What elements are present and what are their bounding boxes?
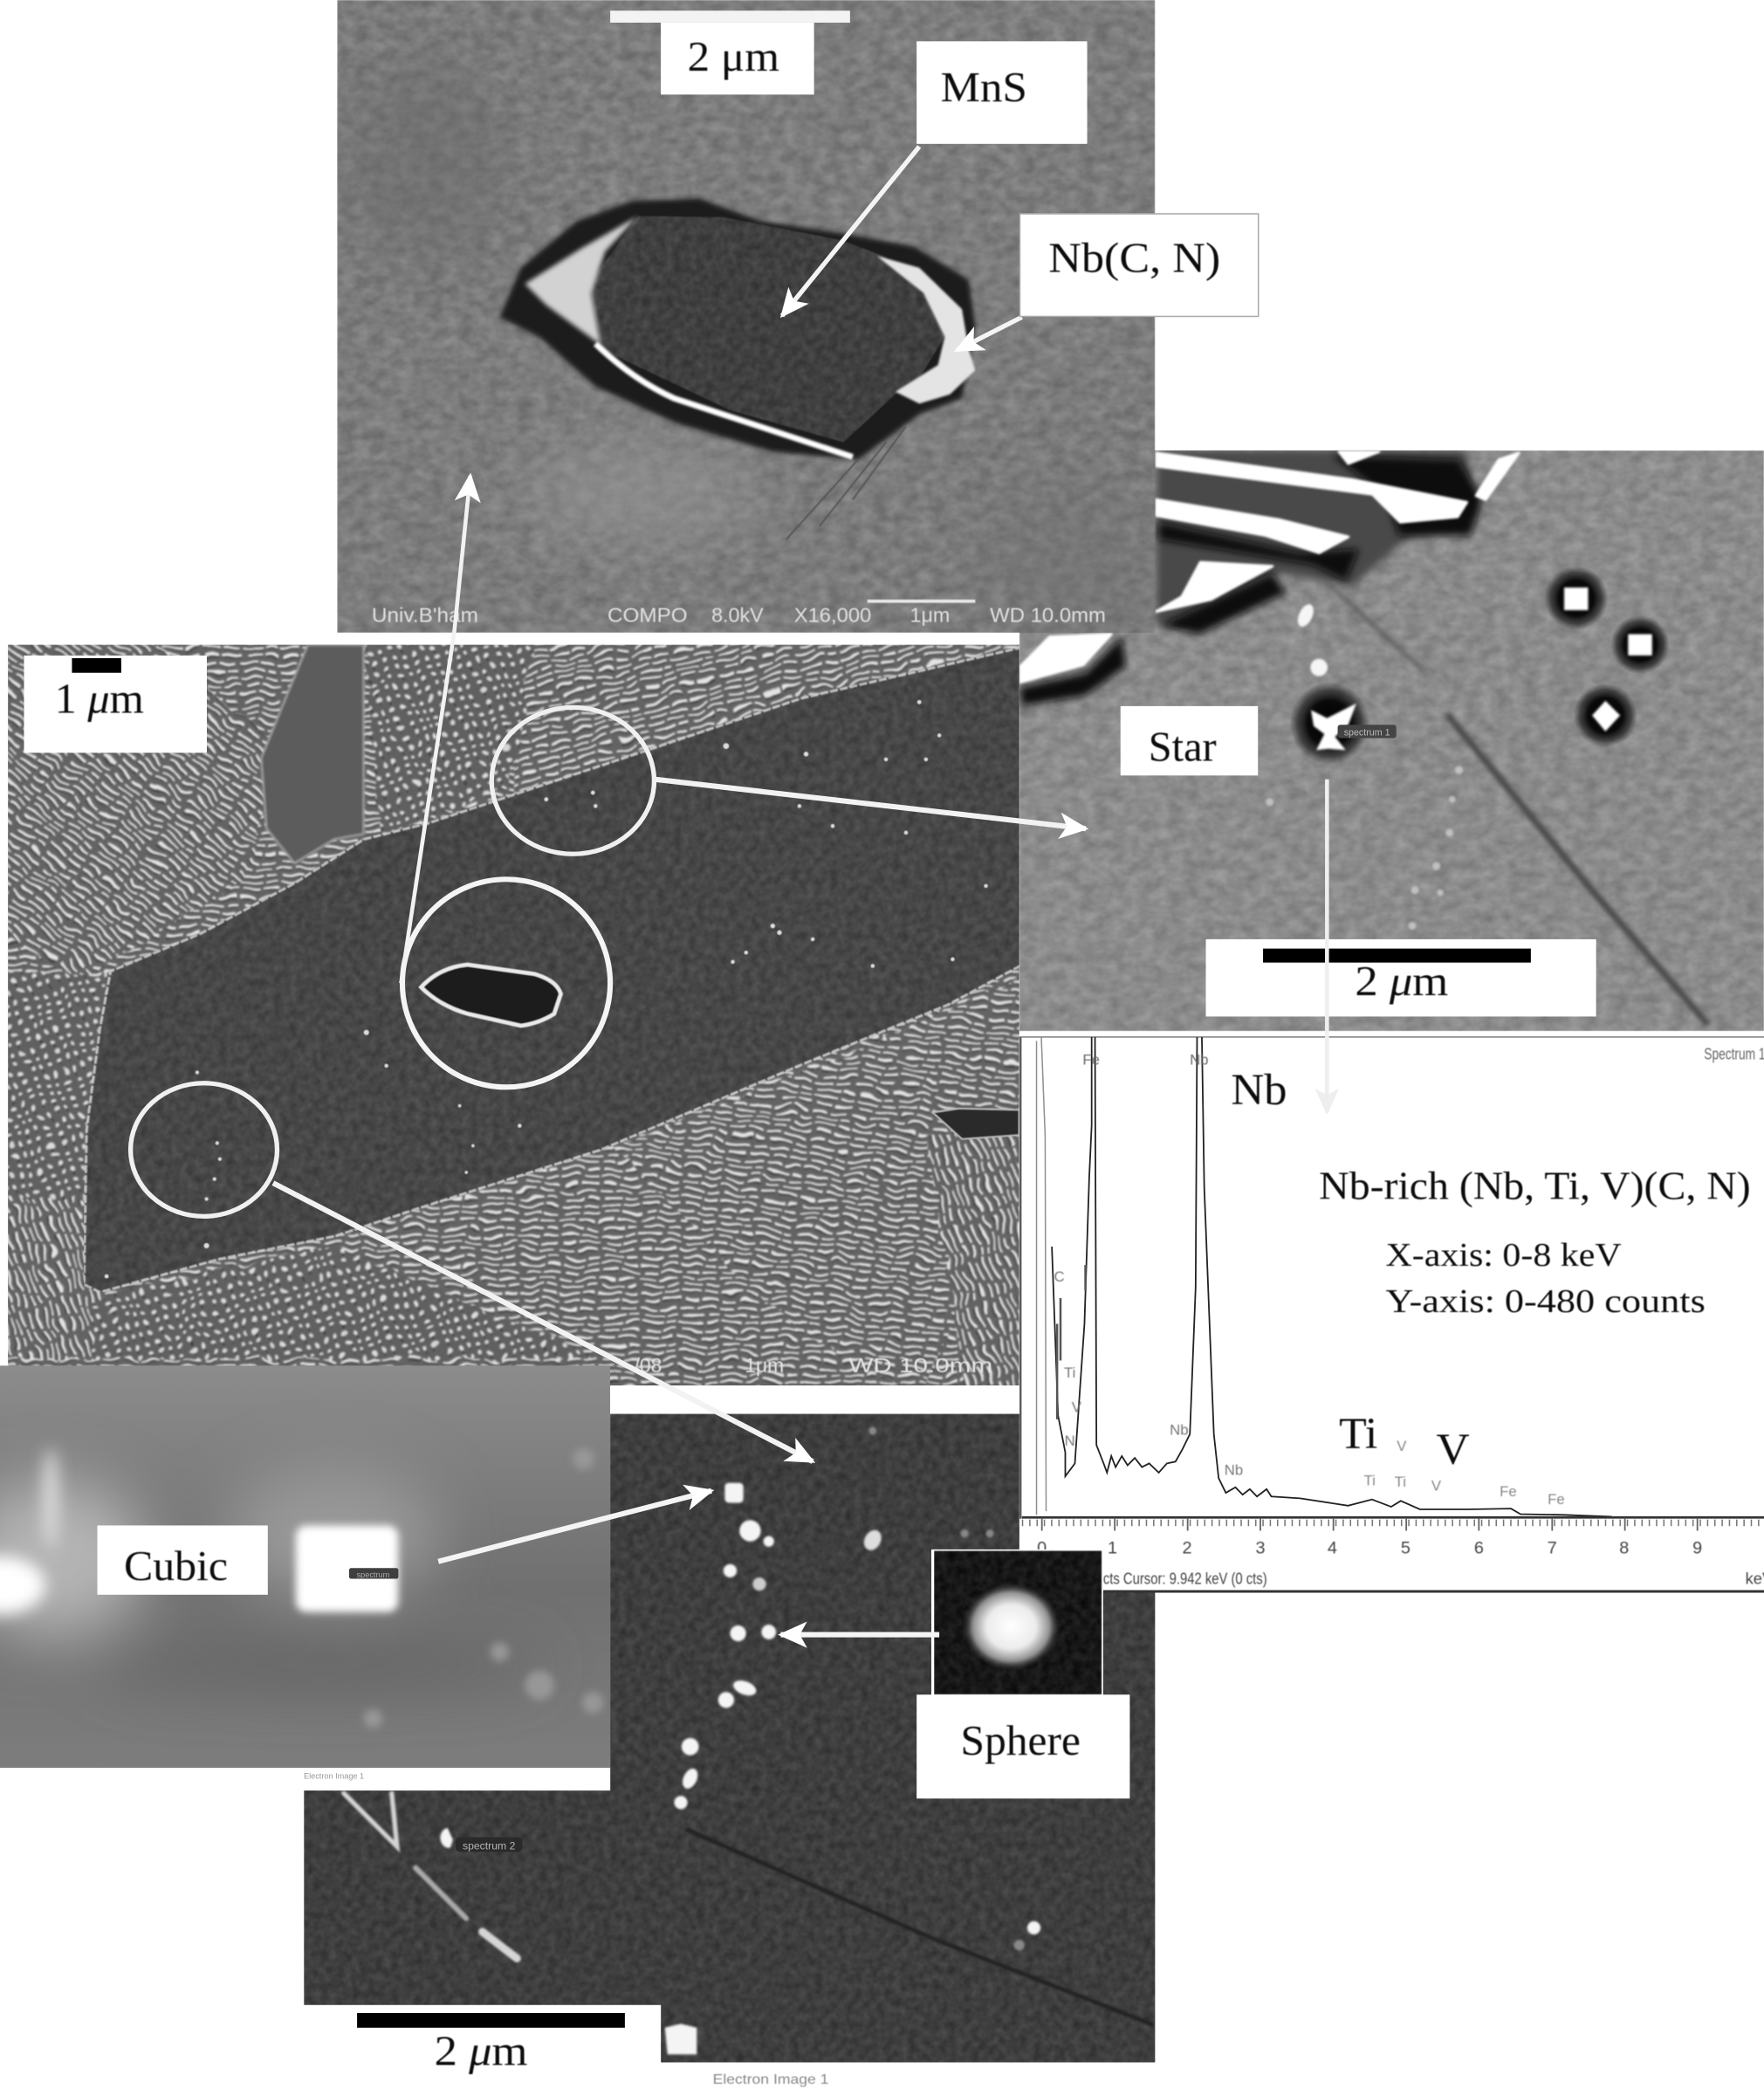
label: Cubic bbox=[97, 1525, 268, 1595]
label: Sphere: Sphere bbox=[961, 1716, 1081, 1764]
panel: star and cube precipitates micrograph bbox=[1019, 450, 1764, 1031]
x axis tick numbers: 9 bbox=[1692, 1538, 1702, 1557]
label: Nb(C, N): Nb(C, N) bbox=[1048, 233, 1220, 281]
small element peak labels: Nb bbox=[1170, 1422, 1189, 1439]
MnS body bbox=[589, 216, 944, 443]
white strip above dark panel bbox=[610, 1385, 1019, 1413]
arrow: upper circle to star micrograph bbox=[655, 780, 1086, 828]
spectrum 2 tag: spectrum 2 bbox=[463, 1839, 516, 1852]
small element peak labels: V bbox=[1397, 1438, 1407, 1454]
scale bar: top 2 um bbox=[610, 10, 850, 94]
top panel background bbox=[337, 0, 1155, 633]
panel: top micrograph of MnS inclusion bbox=[337, 0, 1159, 640]
label: Star bbox=[1121, 706, 1258, 775]
x axis tick numbers: 4 bbox=[1328, 1538, 1337, 1557]
star-shaped precipitate bbox=[1290, 682, 1397, 765]
SEM data strip: X16,000 bbox=[794, 604, 871, 627]
arrow: star particle to spectrum bbox=[1326, 780, 1328, 1112]
scale bar: star panel 2 um bbox=[1205, 939, 1596, 1016]
small element peak labels: V bbox=[1431, 1478, 1442, 1495]
x axis tick numbers: 0 bbox=[1037, 1538, 1047, 1557]
small element peak labels: Ti bbox=[1064, 1364, 1075, 1381]
spectrum background bbox=[1019, 1036, 1764, 1592]
star-shaped precipitate: spectrum 1 bbox=[1344, 727, 1390, 738]
panel: lower dark micrograph with spherical and cubic particles bbox=[304, 1413, 1157, 2064]
spectrum tag bbox=[349, 1568, 398, 1579]
arrow: cubic close-up to particle bbox=[438, 1491, 711, 1562]
MnS inclusion in main micrograph bbox=[421, 965, 561, 1026]
scale bar: 1 um: 1 μm bbox=[55, 674, 144, 722]
x-axis range note: X-axis: 0-8 keV bbox=[1385, 1237, 1622, 1274]
spectrum trace bbox=[1037, 1037, 1611, 1516]
star panel background bbox=[1019, 450, 1764, 1031]
arrow: MnS region to top micrograph bbox=[401, 476, 470, 983]
caption: electron image: Electron Image 1 bbox=[713, 2072, 829, 2087]
label: Star: Star bbox=[1149, 722, 1217, 770]
precipitate dots in dark grain bbox=[105, 700, 988, 1278]
SEM data strip: WD 10.0mm bbox=[990, 604, 1106, 627]
diagonal grain-boundary lines bbox=[1329, 585, 1708, 1025]
small element peak labels bbox=[1054, 1051, 1565, 1508]
cubic precipitates bbox=[1544, 567, 1670, 747]
x axis tick numbers: 8 bbox=[1619, 1538, 1629, 1557]
dark grain-boundary line bbox=[686, 1829, 1154, 2025]
caption under cubic panel: Electron Image 1 bbox=[304, 1771, 364, 1780]
arrow: sphere inset to particle bbox=[780, 1633, 939, 1637]
small element peak labels: Nb bbox=[1190, 1051, 1209, 1068]
SEM data strip: 1μm bbox=[745, 1354, 784, 1377]
arrow: lower circle to dark micrograph bbox=[273, 1183, 813, 1461]
caption under cubic panel bbox=[0, 1768, 610, 1790]
x axis tick numbers bbox=[1037, 1538, 1702, 1557]
SEM data strip bbox=[634, 1357, 992, 1377]
SEM data strip: 1μm bbox=[910, 604, 950, 627]
faint particles bbox=[364, 1448, 603, 1728]
composition label: Nb-rich (Nb, Ti, V)(C, N) bbox=[1319, 1164, 1751, 1208]
SEM data strip: 8.0kV bbox=[711, 604, 764, 627]
cursor readout: cts Cursor: 9.942 keV (0 cts) bbox=[1103, 1570, 1267, 1588]
right Nb(C,N) crescent bbox=[876, 256, 975, 403]
circle: upper precipitates region bbox=[491, 707, 654, 854]
x axis tick numbers: 7 bbox=[1548, 1538, 1557, 1557]
small element peak labels: V bbox=[1072, 1399, 1082, 1416]
SEM data strip: COMPO bbox=[607, 604, 688, 627]
label: Nb(C, N) bbox=[1019, 214, 1259, 316]
scale bar: bottom 2 um: 2 μm bbox=[435, 2027, 527, 2075]
label: Cubic: Cubic bbox=[124, 1542, 228, 1590]
left Nb(C,N) wedge bbox=[525, 216, 638, 345]
arrow: MnS label to inclusion bbox=[782, 147, 919, 316]
frame lines bbox=[1019, 1033, 1764, 1519]
scale bar: top 2 um: 2 μm bbox=[688, 32, 779, 80]
small bright particles bbox=[1294, 601, 1328, 677]
x axis tick numbers: 2 bbox=[1183, 1538, 1192, 1557]
inset: sphere particle bbox=[931, 1550, 1103, 1696]
black shadows around lamellae bbox=[1020, 456, 1481, 706]
x axis bbox=[1022, 1517, 1764, 1531]
bright lower rim bbox=[595, 344, 853, 457]
bright streaks at lower left bbox=[344, 1793, 517, 1958]
SEM data strip: Univ.B'ham bbox=[372, 604, 478, 627]
label: Sphere bbox=[916, 1694, 1129, 1798]
scale bar: 1 um bbox=[24, 656, 207, 752]
V peak label: V bbox=[1436, 1425, 1470, 1474]
spectrum bottom rule bbox=[1103, 1591, 1764, 1592]
dark ferrite grain bbox=[84, 645, 1033, 1292]
strain lines below inclusion bbox=[786, 426, 906, 539]
small element peak labels: Ti bbox=[1395, 1474, 1406, 1490]
scale bar: star panel 2 um: 2 μm bbox=[1355, 957, 1448, 1005]
small upper grain bbox=[261, 645, 364, 863]
cubic panel background bbox=[0, 1365, 610, 1769]
y-axis range note: Y-axis: 0-480 counts bbox=[1385, 1283, 1706, 1320]
x axis tick numbers: 5 bbox=[1401, 1538, 1411, 1557]
inclusion dark rim bbox=[499, 198, 975, 460]
small element peak labels: N bbox=[1065, 1433, 1075, 1449]
x axis tick numbers: 3 bbox=[1255, 1538, 1266, 1557]
small element peak labels: C bbox=[1054, 1268, 1065, 1285]
small element peak labels: Fe bbox=[1500, 1483, 1517, 1500]
lamellar pearlite texture bbox=[0, 640, 1033, 1392]
SEM data strip bbox=[372, 600, 1106, 627]
circle: lower precipitates region bbox=[131, 1083, 277, 1216]
faint dot trail bbox=[1266, 766, 1463, 930]
x axis tick numbers: 1 bbox=[1108, 1538, 1117, 1557]
x axis tick numbers: 6 bbox=[1474, 1538, 1484, 1557]
bright streaks at left bbox=[0, 1448, 58, 1615]
circle: MnS inclusion region bbox=[402, 879, 610, 1087]
cubic particle bbox=[296, 1525, 398, 1612]
scale bar: bottom 2 um bbox=[304, 2005, 661, 2089]
small element peak labels: Fe bbox=[1082, 1051, 1100, 1068]
SEM data strip: WD 10.0mm bbox=[848, 1354, 992, 1377]
Ti peak label: Ti bbox=[1339, 1409, 1377, 1458]
small dark inclusion at right bbox=[933, 1109, 1019, 1139]
soft lighter areas bbox=[0, 1466, 546, 1687]
label: MnS bbox=[916, 41, 1088, 144]
panel: EDS spectrum bbox=[1019, 1033, 1764, 1592]
spectrum tag: spectrum bbox=[357, 1570, 390, 1579]
panel: cubic particle close-up bbox=[0, 1365, 610, 1769]
grey zone behind lamellae bbox=[1157, 450, 1479, 626]
panel: main micrograph of lamellar grain structure bbox=[0, 640, 1033, 1392]
soft tonal variations bbox=[347, 53, 1159, 640]
small element peak labels: Fe bbox=[1548, 1491, 1565, 1508]
small element peak labels: Nb bbox=[1225, 1461, 1243, 1478]
bright lamellae bbox=[1020, 451, 1519, 682]
arrow: Nb(C,N) label to crescent bbox=[957, 317, 1022, 350]
small element peak labels: Ti bbox=[1364, 1473, 1376, 1489]
dark panel background bbox=[304, 1413, 1157, 2064]
label: MnS: MnS bbox=[941, 63, 1027, 111]
particles bbox=[440, 1427, 1040, 2054]
SEM data strip: /08 bbox=[635, 1354, 662, 1377]
Nb peak label: Nb bbox=[1231, 1065, 1287, 1114]
spectrum 2 tag bbox=[456, 1838, 522, 1852]
